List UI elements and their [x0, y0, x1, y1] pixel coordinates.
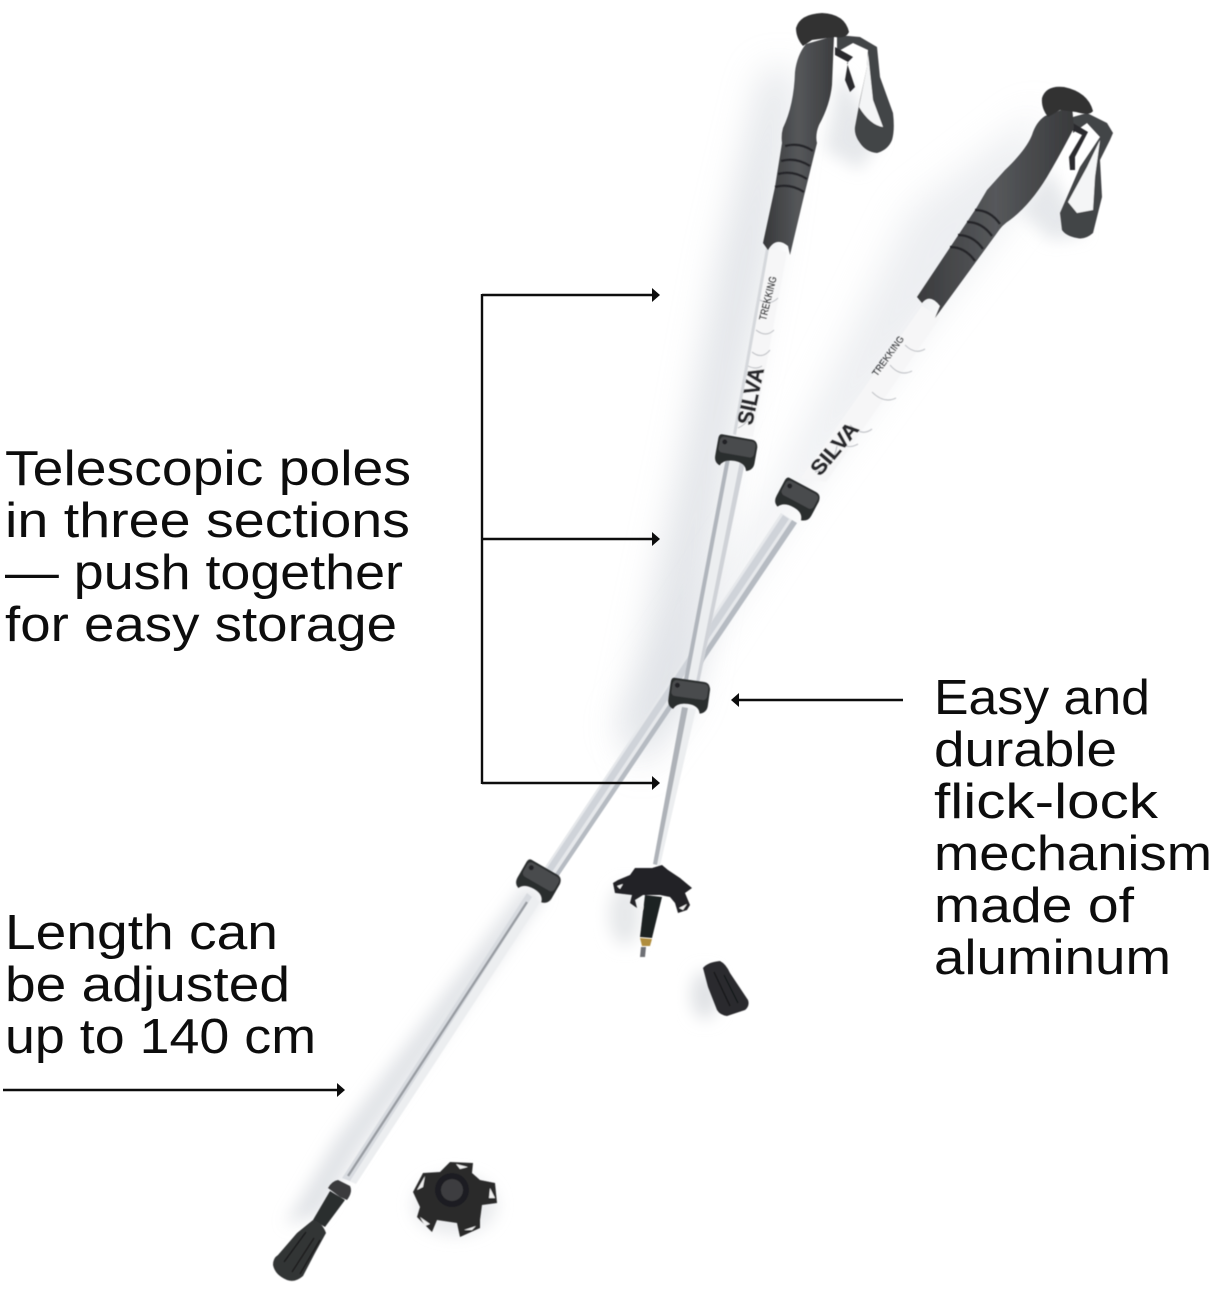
arrow: to flick-lock — [731, 693, 903, 707]
arrow: to pole length — [3, 1083, 345, 1097]
text: flick-lock mechanism: Easy and — [934, 671, 1150, 725]
soft drop shadows — [285, 70, 1085, 1235]
left grip top knob — [796, 13, 849, 46]
clamp: right pole lower — [513, 858, 563, 906]
text: flick-lock mechanism — [934, 671, 1212, 985]
arrow: upper section — [482, 288, 660, 302]
text: telescopic poles: Telescopic poles — [5, 442, 411, 496]
right pole upper section — [801, 306, 940, 482]
text: flick-lock mechanism: durable — [934, 723, 1117, 777]
pole: right trekking pole — [342, 306, 940, 1184]
handle: left pole grip and strap — [763, 13, 894, 255]
right strap — [1060, 113, 1113, 238]
text: flick-lock mechanism: aluminum — [934, 931, 1171, 985]
arrow: lower section — [482, 776, 660, 790]
text: flick-lock mechanism: flick-lock — [934, 775, 1159, 829]
text: adjustable length: up to 140 cm — [5, 1010, 316, 1064]
clamp: left pole lower — [667, 677, 711, 715]
text: flick-lock mechanism: mechanism — [934, 827, 1212, 881]
right pole middle section — [543, 513, 797, 880]
bracket arrows to pole sections — [482, 288, 660, 790]
right pole model text: TREKKING — [871, 334, 907, 379]
left pole brand text: SILVA — [732, 365, 769, 427]
clamp: right pole upper — [772, 476, 822, 524]
text: telescopic poles — [5, 442, 411, 652]
basket: mounted small basket with spike — [613, 865, 692, 957]
text: flick-lock mechanism: made of — [934, 879, 1134, 933]
left pole middle section — [682, 458, 745, 693]
left pole upper section — [732, 248, 787, 437]
arrow: middle section — [482, 532, 660, 546]
text: adjustable length: be adjusted — [5, 958, 290, 1012]
basket: detached large trekking basket — [413, 1162, 497, 1237]
handle: right pole grip and strap — [917, 87, 1113, 318]
pole tip: detached rubber tip — [703, 961, 749, 1016]
flick-lock clamps — [513, 434, 822, 906]
text: adjustable length — [5, 906, 316, 1064]
pole: left trekking pole — [653, 248, 787, 866]
clamp: left pole upper — [714, 434, 758, 472]
right grip ribs — [950, 210, 1000, 261]
text: telescopic poles: for easy storage — [5, 598, 397, 652]
right pole lower section — [342, 893, 540, 1184]
right grip body — [917, 106, 1074, 318]
left strap — [835, 35, 894, 153]
left grip ribs — [775, 145, 813, 192]
left grip body — [763, 36, 834, 255]
left pole model text: TREKKING — [757, 275, 780, 322]
text: adjustable length: Length can — [5, 906, 278, 960]
right pole brand text: SILVA — [806, 418, 864, 480]
stem and brass spike — [640, 895, 662, 957]
text: telescopic poles: — push together — [5, 546, 403, 600]
left pole lower section — [653, 707, 696, 866]
text: telescopic poles: in three sections — [5, 494, 410, 548]
right grip top knob — [1042, 87, 1093, 117]
pole tip: mounted rubber tip — [273, 1180, 351, 1281]
